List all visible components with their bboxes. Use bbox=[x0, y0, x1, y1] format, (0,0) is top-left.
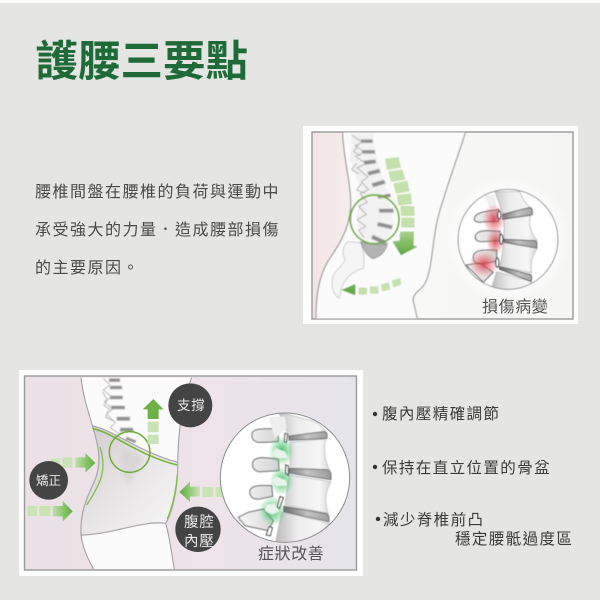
label: lesion: 損傷病變 bbox=[482, 298, 548, 316]
badge text: support: 支撐 bbox=[177, 398, 206, 413]
badge: correction bbox=[29, 461, 68, 500]
bullet two: 保持在直立位置的骨盆 bbox=[382, 458, 551, 477]
bullet list bbox=[373, 404, 573, 548]
torso fill bbox=[81, 378, 192, 569]
badge text: abdominal pressure: 內壓 bbox=[184, 534, 215, 550]
body fill and outline bbox=[316, 133, 465, 318]
brace bbox=[81, 426, 178, 535]
icon: right arrows bbox=[27, 453, 95, 522]
icon: up arrow bbox=[143, 399, 164, 444]
badge: support bbox=[168, 383, 212, 427]
sacrum bbox=[332, 242, 364, 298]
badge text: correction: 矯正 bbox=[36, 474, 61, 488]
spine bbox=[350, 133, 394, 243]
badge: abdominal pressure bbox=[175, 507, 221, 552]
bullet one: 腹內壓精確調節 bbox=[382, 404, 500, 423]
spine bbox=[102, 378, 120, 434]
bullet three bbox=[376, 511, 573, 548]
icon: left arrow bbox=[179, 482, 223, 502]
highlight ring bbox=[109, 432, 150, 472]
badge text: abdominal pressure: 腹腔 bbox=[184, 514, 215, 531]
intro text block: 腰椎間盤在腰椎的負荷與運動中 bbox=[35, 183, 280, 201]
title: 護腰三要點 bbox=[36, 39, 248, 86]
panel: injury diagram bbox=[303, 126, 578, 324]
icon: backward arrow bbox=[341, 278, 401, 295]
torso outline bbox=[81, 378, 192, 569]
intro text block: 的主要原因。 bbox=[35, 259, 140, 277]
top white strip bbox=[0, 0, 600, 3]
magnified healed spine bbox=[220, 412, 350, 545]
label: improved: 症狀改善 bbox=[258, 545, 324, 563]
bullet three: 減少脊椎前凸 bbox=[383, 511, 484, 529]
highlight ring bbox=[350, 195, 399, 244]
panel: improvement diagram bbox=[19, 370, 363, 576]
icon: downward load arrow bbox=[385, 157, 418, 255]
bullet three: 穩定腰骶過度區 bbox=[455, 530, 573, 548]
intro text block bbox=[35, 183, 280, 277]
intro text block: 承受強大的力量．造成腰部損傷 bbox=[35, 221, 280, 239]
magnified injured spine bbox=[457, 188, 559, 290]
